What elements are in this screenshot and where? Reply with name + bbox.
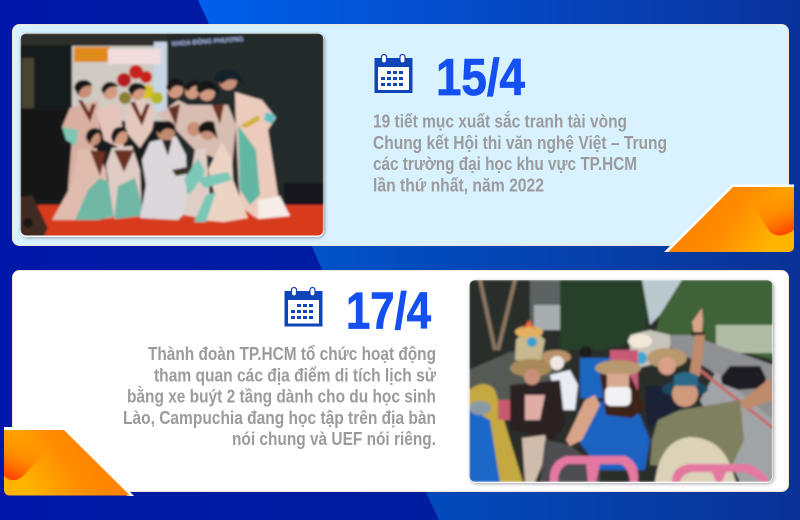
text block: 15/4 description: 19 tiết mục xuất sắc tranh tài vòng [373,110,627,132]
pink bus seats [550,456,638,482]
photo: double-decker bus tour [469,280,773,483]
decorative orange corner [664,184,794,252]
text block: 15/4 description: Chung kết Hội thi văn nghệ Việt – Trung [373,133,667,153]
panel background [12,24,788,246]
man with hat [650,400,744,470]
man in white [140,136,188,220]
text block: 17/4 description: bằng xe buýt 2 tầng dành cho du học sinh [127,386,436,406]
photo: stage performance [20,33,324,237]
front girls [184,148,210,218]
car [721,366,766,390]
panel: 15/4 event [12,24,794,252]
photo: stage performance: KHOA ĐÔNG PHƯƠNG [172,34,244,48]
panel: 17/4 event [4,270,788,496]
panel background [12,270,788,492]
man behind [646,386,680,428]
date: 15/4: 15/4 [436,49,525,107]
standing girls [62,100,100,190]
woman in hat [510,380,565,440]
tree trunks [480,280,515,350]
icon: calendar [284,288,322,326]
flowers [117,65,163,104]
back passengers [513,334,547,362]
text block: 17/4 description: nói chung và UEF nói riêng. [232,429,436,449]
foreground young woman [578,400,650,470]
seated girls [52,148,112,220]
text block: 17/4 description: Thành đoàn TP.HCM tổ chức hoạt động [148,344,436,364]
raised arm [689,335,705,376]
text block: 17/4 description: Lào, Campuchia đang học tập trên địa bàn [123,408,436,428]
left woman with scarf [469,410,503,482]
floor between seats [540,440,600,482]
conical hat [655,437,736,482]
text block: 15/4 description: lần thứ nhất, năm 2022 [373,176,544,196]
decorative orange corner [4,427,134,496]
text block: 15/4 description [373,110,667,196]
text block: 17/4 description [123,344,437,449]
tall girl [233,90,280,220]
icon: calendar [374,54,412,93]
date: 17/4: 17/4 [346,282,431,340]
text block: 15/4 description: các trường đại học khu vực TP.HCM [373,154,637,174]
text block: 17/4 description: tham quan các địa điểm di tích lịch sử [154,366,437,386]
